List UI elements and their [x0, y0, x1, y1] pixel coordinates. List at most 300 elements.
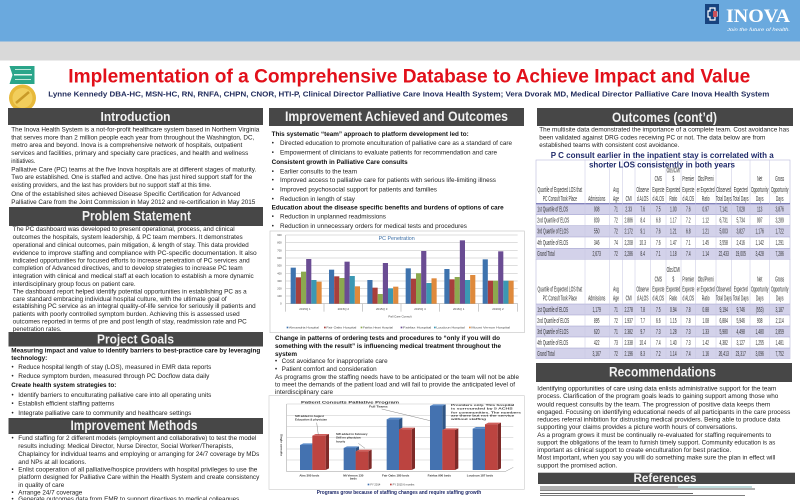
text: problem statement body: evidence to improve staffing and compliance with PC-specific documentation. It also — [13, 251, 257, 257]
text: project goals list: Reduce hospital length of stay (LOS), measured in EMR data reports — [18, 365, 211, 371]
bar chart: PC penetration: 100 — [277, 294, 282, 298]
table column: CMI: 2.278 — [624, 307, 633, 315]
table column: net opportunity days: Net — [757, 276, 763, 284]
group: Loudoun bars — [473, 423, 501, 470]
table column: Obs/Premier expected ratio: er Expected — [697, 187, 715, 195]
table column: CMS expected ALOS: d ALOS — [653, 296, 664, 303]
table column: CMS expected ALOS: 7.4 — [656, 340, 661, 348]
text: recommendations body: process. Clarification of the program goals leads to gaining support among those who — [537, 394, 779, 400]
text: recommendations body: would request consults by the team. The progression of positive data keeps them — [536, 402, 770, 408]
text: problem statement body: interdisciplinary group focus on patient care. — [13, 282, 136, 288]
text: introduction body: initiatives. — [11, 159, 36, 165]
heading: recommendations — [536, 363, 792, 382]
table column: premier expected ALOS — [682, 176, 694, 359]
bar chart: PC penetration: 900 — [277, 233, 282, 237]
group: Mt Vernon bars — [344, 446, 372, 470]
text: introduction body: services and facilities, primary and specialty care practices, and health and wellness — [11, 151, 248, 157]
text: project goals list: technology: — [11, 356, 47, 362]
table column: premier expected ALOS: 7.8 — [686, 318, 691, 326]
panel: improvement achieved and outcomes — [269, 108, 524, 496]
table column: CMI: 2.338 — [624, 340, 633, 348]
table column: net opportunity days: Days — [756, 296, 764, 303]
text: improvement methods list: Chaplaincy for individual teams and employing or arranging for 24/7 coverage by MDs — [18, 452, 259, 458]
icon: gold seal — [9, 84, 36, 112]
table column: admissions: 422 — [594, 340, 600, 348]
group: Fair Oaks bars — [387, 418, 415, 470]
text: introduction body: Palliative Care from the Joint Commission in May 2012 and re-certification in May 2015 — [11, 200, 256, 206]
heading: outcomes continued — [537, 108, 793, 126]
bar chart: patient consults palliative program: beds — [350, 477, 357, 481]
table column: Obs/Premier expected ratio: 1.42 — [702, 340, 709, 348]
heading: references: References — [634, 473, 696, 485]
text: ordering patterns and staffing: Cost avoidance for inappropriate care — [282, 359, 388, 365]
table column: admissions: 895 — [594, 318, 600, 326]
table column: average age: 73 — [614, 340, 618, 348]
table column: observed ALOS: d ALOS — [637, 196, 649, 204]
bar chart: PC penetration: PC Penetration — [379, 236, 415, 242]
text: outcomes list: Consistent growth in Palliative Care consults — [272, 160, 408, 166]
text: outcomes list: Improved psychosocial support for patients and families — [280, 188, 437, 194]
table column: premier expected ALOS: d ALOS — [683, 196, 694, 204]
table column: net opportunity days: 3,428 — [755, 251, 764, 259]
text: outcomes list: • — [272, 214, 274, 220]
group: Fairfax bars — [430, 404, 458, 470]
table column: row labels: PC Consult Took Place — [543, 196, 577, 204]
table column: row labels: 4th Quartile of ELOS — [537, 240, 568, 248]
bar chart: patient consults palliative program: without staffing — [449, 417, 486, 421]
table column: premier expected ALOS: 7.3 — [686, 340, 691, 348]
bar chart: PC penetration: Loudoun Hospital — [436, 326, 465, 330]
table column: Obs/Premier expected ratio: 0.97 — [702, 206, 709, 214]
table column: average age: 72 — [614, 251, 618, 259]
table column: row labels: Grand Total — [537, 251, 555, 259]
text: improvement methods list: Enlist cooperation of all palliative/hospice providers with hospital privileges to use the — [18, 468, 258, 474]
text: ordering patterns and staffing: interdisciplinary care — [275, 390, 334, 396]
table column: row labels: Quartile of Expected LOS that — [538, 187, 582, 195]
text: recommendations body: Identifying opportunities of care using data enlists administrative support for the team — [537, 386, 776, 392]
text: problem statement body: The dashboard report helped identify potential opportunities in establishing PC as a — [13, 290, 247, 296]
bar chart: PC penetration: 800 — [277, 241, 282, 245]
bar chart: patient consults palliative program: Patient Consults Palliative Program — [301, 400, 400, 404]
table column: observed total days: 5,980 — [719, 329, 728, 337]
text: improvement methods list — [12, 436, 259, 500]
bar chart: PC penetration: Mount Vernon Hospital — [471, 326, 510, 330]
table column: admissions: 839 — [594, 217, 600, 225]
table column: premier expected ALOS: 7.4 — [686, 251, 691, 259]
text: outcomes list — [272, 132, 513, 230]
table column: gross opportunity days: Opportunity — [771, 187, 789, 195]
bar chart: PC penetration: 2015Q 2 — [338, 307, 349, 311]
icon: teal certification ribbon — [10, 66, 34, 84]
table column: CMI: CMI — [626, 296, 632, 303]
table column: gross opportunity days: 1,722 — [775, 228, 784, 236]
table column: observed ALOS: 7.8 — [640, 307, 645, 315]
table column: observed ALOS: 8.4 — [640, 217, 645, 225]
table column: observed total days: Total Days — [716, 196, 732, 204]
text: outcomes list: • — [272, 188, 274, 194]
table column: observed total days: 9,194 — [719, 307, 728, 315]
text: ordering patterns and staffing: system — [275, 352, 297, 358]
table column: observed ALOS: Observe — [636, 286, 649, 294]
table column: average age: Age — [613, 296, 619, 303]
bar chart: PC penetration: 2016Q 2 — [492, 307, 504, 311]
text: ordering patterns and staffing — [275, 336, 520, 396]
table column: observed ALOS — [636, 187, 649, 359]
table column: expected total days: 4,498 — [736, 329, 745, 337]
text: outcomes list: Reduction in unnecessary orders for medical tests and procedures — [280, 224, 467, 230]
table column: row labels: 1st Quartile of ELOS — [537, 206, 568, 214]
table column: observed ALOS: 9.7 — [640, 329, 645, 337]
table column: observed ALOS: 8.3 — [640, 351, 645, 359]
table column: Obs/Premier expected ratio: Ratio — [702, 196, 710, 204]
table column: expected total days: Total Days — [733, 196, 749, 204]
table column: row labels: PC Consult Took Place — [543, 296, 577, 303]
table column: Obs/Premier expected ratio: Ratio — [702, 296, 710, 303]
table column: CMI: CMI — [626, 196, 632, 204]
text: problem statement body: operational and clinical outcomes, pain mitigation, & length of stay. This data provided — [13, 243, 249, 249]
table column: observed total days: 6,884 — [719, 318, 728, 326]
table column: expected total days: 19,005 — [736, 251, 746, 259]
table column: observed total days: Total Days — [716, 296, 732, 303]
table column: admissions: 550 — [594, 228, 600, 236]
bar chart: PC penetration: 2015Q 1 — [299, 307, 311, 311]
bar chart: PC penetration: 2016Q 1 — [453, 307, 465, 311]
table column: CMS expected ALOS: Expecte — [652, 187, 664, 195]
bar chart: PC penetration: 700 — [277, 248, 282, 252]
table column: observed total days: 22,433 — [719, 251, 729, 259]
table column: Obs/CMI expected ratio: 1.18 — [670, 251, 677, 259]
bar chart: patient consults palliative program: SW added in August — [295, 414, 324, 418]
table column: Obs/Premier expected ratio: 1.08 — [702, 318, 709, 326]
text: ordering patterns and staffing: to meet the demands of the patient load and will fail to provide the anticipated level of — [275, 382, 515, 388]
table column: Obs/CMI expected ratio: Expected — [666, 286, 680, 294]
text: project goals list: • — [12, 393, 14, 399]
table column: net opportunity days: Opportunity — [751, 187, 769, 195]
table column: Obs/CMI expected ratio: Obs/CMI — [667, 168, 680, 175]
data tables — [536, 160, 790, 359]
table column: expected total days: 5,946 — [736, 318, 745, 326]
table column: admissions: 620 — [594, 329, 600, 337]
table column: observed total days: Observed — [716, 187, 731, 195]
text: problem statement body: patients with poorly controlled symptom burden. Achieving this is assessed used — [13, 312, 240, 318]
text: outcomes list: • — [272, 170, 274, 176]
text: introduction body — [11, 127, 260, 206]
table column: observed ALOS: 10.4 — [639, 340, 646, 348]
table column: premier expected ALOS: 7.8 — [686, 307, 691, 315]
table column: average age: 74 — [614, 240, 618, 248]
table column: gross opportunity days: 3,289 — [775, 217, 784, 225]
table column: observed total days: Observed — [716, 286, 731, 294]
table column: net opportunity days: 908 — [757, 318, 763, 326]
table column: Obs/CMI expected ratio: 1.15 — [670, 318, 677, 326]
text: problem statement body: outcomes the hospitals, system leadership, & PC team members. It demonstrates — [13, 235, 243, 241]
bar chart: PC penetration: 200 — [277, 287, 282, 291]
text: recommendations body: engaged. Focusing on identifying educational needs of all participants in the care process — [537, 410, 790, 416]
table column: net opportunity days: 113 — [757, 206, 762, 214]
text: recommendations body: support the obligations of the team to furnish timely support. Community education is as — [537, 441, 775, 447]
table column: observed total days: 26,413 — [719, 351, 729, 359]
table column: observed ALOS: 7.7 — [640, 318, 645, 326]
table column: Obs/CMI expected ratio: 0.94 — [670, 307, 677, 315]
text: outcomes list: Reduction in length of stay — [280, 197, 355, 203]
bar chart: patient consults palliative program: Fairfax 900 beds — [428, 473, 451, 477]
table column: premier expected ALOS: Premier — [682, 276, 694, 284]
text: recommendations body: reduces referral inhibition for distrusting medical providers. Being able to produce data — [537, 417, 781, 423]
text: improvement methods list: • — [12, 436, 14, 442]
table column: gross opportunity days: 2,859 — [775, 329, 784, 337]
authors: Lynne Kennedy DBA-HC, MSN-HC, RN, RNFA, CHPN, CNOR, HTI-P, Clinical Director Palliative Care Inova Health System; Vera Dvorak MD, Medical Director Palliative Care Inova Health System — [48, 92, 769, 99]
bar chart: patient consults palliative program: are there but not the service — [451, 414, 515, 418]
table column: gross opportunity days: 2,114 — [776, 318, 784, 326]
table column: gross opportunity days: 3,876 — [775, 206, 784, 214]
text: recommendations body: important as clinical support to create enculturation for best practice. — [537, 448, 732, 454]
text: outcomes list: Reduction in unplanned readmissions — [280, 214, 386, 220]
table column: gross opportunity days: 7,752 — [775, 351, 784, 359]
table column: admissions: Admissions — [588, 296, 605, 303]
table column: gross opportunity days: 3,187 — [775, 307, 784, 315]
text: project goals list: Establish efficient staffing patterns — [18, 402, 114, 408]
table column: row labels — [537, 187, 582, 359]
table column: expected total days: 2,416 — [736, 240, 745, 248]
table column: Obs/CMI expected ratio: 1.14 — [670, 351, 677, 359]
table column: average age: 72 — [614, 351, 618, 359]
table: first period — [536, 160, 790, 259]
text: improvement methods list: • — [12, 468, 14, 474]
logo: Inova: Join the future of health. — [726, 27, 790, 32]
text: outcomes list: Empowerment of clinicians to evaluate patients for recommendation and care — [280, 150, 498, 156]
table column: Obs/Premier expected ratio: er Expected — [697, 286, 715, 294]
text: project goals list: • — [12, 411, 14, 417]
text: recommendations body — [536, 386, 790, 470]
table column: expected total days: 23,317 — [736, 351, 746, 359]
bar chart: PC penetration: Fairfax Heart Hospital — [363, 326, 393, 330]
table column: average age: Avg — [613, 187, 619, 195]
table column: Obs/CMI expected ratio: Ratio — [669, 196, 677, 204]
table column: CMS expected ALOS: Expecte — [652, 286, 664, 294]
text: project goals list: Identify barriers to enculturating palliative care into all operating units — [18, 393, 211, 399]
text: project goals list: • — [12, 365, 14, 371]
table column: premier expected ALOS: Premier — [682, 176, 694, 184]
table column: observed total days: 6,731 — [719, 217, 728, 225]
table column: CMS expected ALOS: 7.6 — [656, 228, 661, 236]
table column: net opportunity days: 1,176 — [755, 228, 764, 236]
bar chart: patient consults palliative program: Loudoun 187 beds — [467, 473, 494, 477]
text: introduction body: that serves more than 2 million people each year from throughout the Washington, DC, — [11, 135, 255, 141]
table column: CMS expected ALOS: 7.3 — [656, 329, 661, 337]
table column: CMS expected ALOS: 6.8 — [656, 217, 661, 225]
heading: table title — [551, 151, 774, 170]
text: problem statement body: care standard embracing individual hospital culture, with the ultimate goal of — [13, 297, 227, 303]
table column: Obs/CMI expected ratio: $ — [672, 176, 674, 184]
table column: average age: 71 — [614, 206, 618, 214]
table column: CMI: 2,286 — [624, 251, 633, 259]
table column: gross opportunity days: Gross — [775, 176, 784, 184]
table column: row labels: Quartile of Expected LOS that — [538, 286, 582, 294]
table column: Obs/Premier expected ratio: Obs/Premi — [698, 176, 714, 184]
table column: Obs/Premier expected ratio: 1.45 — [702, 240, 709, 248]
table column: net opportunity days: 3,096 — [755, 351, 764, 359]
text: improvement methods list: and NPs at all locations. — [18, 460, 87, 466]
bar chart: PC penetration: 400 — [277, 271, 282, 275]
text: problem statement body: indicated opportunities for focused efforts to increase penetration of PC services and — [13, 258, 250, 264]
table column: observed ALOS: 7.6 — [640, 206, 645, 214]
bar chart: patient consults palliative program: Fair Oaks 180 beds — [382, 473, 410, 477]
text: outcomes continued body: established teams with consistent cost avoidance. — [539, 143, 680, 149]
table column: average age: 72 — [614, 228, 618, 236]
table column: observed ALOS: d ALOS — [637, 296, 649, 303]
table column: row labels: 2nd Quartile of ELOS — [537, 217, 569, 225]
text: introduction body: existing providers, and the last has providers but no support staff at this time. — [11, 183, 212, 189]
text: project goals list: • — [12, 402, 14, 408]
text: improvement methods list: platform designed for Palliative Care within the Health System and create consistency — [18, 475, 259, 481]
heading: project goals — [8, 332, 263, 346]
text: outcomes list: • — [272, 197, 274, 203]
table column: net opportunity days: (553) — [756, 307, 764, 315]
table column: Obs/CMI expected ratio: $ — [672, 276, 674, 284]
table column: observed ALOS: 10.3 — [639, 240, 646, 248]
bar chart: PC penetration: 500 — [277, 264, 282, 268]
heading: improvement achieved and outcomes: Improvement Achieved and Outcomes — [285, 109, 508, 124]
heading: table title: shorter LOS consistently in both years — [589, 161, 736, 170]
panel: recommendations — [536, 363, 792, 470]
bar chart: PC penetration: 2015Q 3 — [376, 307, 388, 311]
heading: problem statement — [9, 207, 263, 226]
table column: CMI: 2.196 — [624, 351, 633, 359]
table column: Obs/CMI expected ratio: Obs/CMI — [667, 267, 680, 275]
table column: net opportunity days: 1,142 — [755, 240, 764, 248]
text: project goals list: Create health system strategies to: — [11, 383, 116, 389]
table column: admissions: Admissions — [588, 196, 605, 204]
text: outcomes list: • — [272, 224, 274, 230]
table column: average age: 71 — [614, 307, 618, 315]
table column: admissions: 2,673 — [592, 251, 601, 259]
text: problem statement body: The PC dashboard was developed to present operational, process, and clinical — [13, 227, 235, 233]
table column: Obs/Premier expected ratio: 1.21 — [702, 228, 709, 236]
heading: recommendations: Recommendations — [609, 364, 716, 380]
text: introduction body: Palliative Care (PC) teams at the five Inova hospitals are at different stages of maturity. — [11, 168, 257, 174]
text: outcomes list: Improved access to palliative care for patients with serious life-limiting illness — [280, 178, 496, 184]
text: recommendations body: support the promised action. — [537, 464, 618, 470]
table column: average age: Age — [613, 196, 619, 204]
bar chart: patient consults palliative program: Still no physician — [336, 436, 361, 440]
table column: CMS expected ALOS: CMS — [655, 276, 662, 284]
bar chart: PC penetration: 600 — [277, 256, 282, 260]
text: project goals list — [11, 348, 261, 417]
table column: row labels: 3rd Quartile of ELOS — [537, 329, 569, 337]
table column: premier expected ALOS: 7.4 — [686, 351, 691, 359]
table column: Obs/Premier expected ratio: 0.88 — [702, 307, 709, 315]
text: ordering patterns and staffing: As programs grow the staffing needs have to be anticipated or the team will not be able — [275, 375, 520, 381]
text: outcomes list: • — [272, 150, 274, 156]
text: problem statement body: outcomes reported in terms of pre and post length of stay, readmission rate and PC — [13, 320, 247, 326]
text: problem statement body — [13, 227, 257, 333]
text: problem statement body: completion of Advanced directives, and to develop strategies to increase PC team — [13, 266, 243, 272]
text: ordering patterns and staffing: Change in patterns of ordering tests and procedures to “only if you will do — [275, 336, 500, 342]
group: Alex bars — [300, 434, 329, 470]
bar chart: patient consults palliative program: Single consults — [280, 434, 284, 456]
heading: project goals: Project Goals — [97, 332, 174, 346]
logo: Inova — [705, 4, 790, 32]
text: recommendations body: Most important, when you say you will do something make sure the plan in effect will — [537, 456, 775, 462]
bar chart: patient consults palliative program: for communities. The numbers — [451, 410, 522, 414]
text: introduction body: The Inova Health System is a not-for-profit healthcare system based in Northern Virginia — [11, 127, 260, 133]
header band — [0, 0, 800, 60]
text: problem statement body: establishing PC service as an integral quality-of-life service for seriously ill patients and — [13, 304, 256, 310]
text: introduction body: Two are established. One is staffed and active. One has just hired support staff for the — [11, 175, 253, 181]
text: introduction body: One of the established sites achieved Disease Specific Certification for Advanced — [11, 192, 240, 198]
bar chart: patient consults palliative program: Alex 300 beds — [299, 473, 320, 477]
text: outcomes list: Education about the disease specific benefits and burdens of options of care — [272, 206, 504, 212]
table column: admissions: 908 — [594, 206, 600, 214]
bar chart: PC penetration — [270, 231, 524, 333]
text: improvement methods list: Fund staffing for 2 different models (employment and collaborative) to test the model — [18, 436, 256, 442]
text: ordering patterns and staffing: • — [275, 359, 277, 365]
table column: expected total days: Total Days — [733, 296, 749, 303]
table column: net opportunity days: 1,480 — [755, 329, 764, 337]
table column: gross opportunity days: Opportunity — [771, 286, 789, 294]
bar chart: patient consults palliative program: Mt Vernon 130 — [343, 473, 364, 477]
text: project goals list: Integrate palliative care to community and healthcare settings — [18, 411, 191, 417]
table column: expected total days: Expected — [734, 187, 748, 195]
heading: table title: P C consult earlier in the inpatient stay is correlated with a — [551, 151, 774, 160]
table column: gross opportunity days: 7,286 — [775, 251, 784, 259]
table column: expected total days: 5,734 — [736, 217, 745, 225]
table column: Obs/Premier expected ratio: 1.14 — [702, 251, 709, 259]
text: introduction body: metro area and beyond. Inova is a comprehensive network of hospitals, outpatient — [11, 143, 243, 149]
bar chart: PC penetration: Alexandria Hospital — [289, 326, 319, 330]
table column: Obs/Premier expected ratio: 1.33 — [702, 329, 709, 337]
bar chart: patient consults palliative program: is surrounded by 5 ACHS — [451, 407, 513, 411]
table column: Obs/CMI expected ratio: 1.17 — [670, 217, 677, 225]
bar chart: patient consults palliative program: SW added in February — [336, 432, 368, 436]
table column: expected total days: 3,827 — [736, 228, 745, 236]
heading: outcomes continued: Outcomes (cont’d) — [612, 109, 717, 125]
table column: CMS expected ALOS: CMS — [655, 176, 662, 184]
table column: CMI: 2.172 — [624, 228, 633, 236]
text: outcomes list: • — [272, 141, 274, 147]
table column: expected total days: 7,028 — [736, 206, 745, 214]
text: outcomes list: This systematic “team” approach to platform development led to: — [272, 132, 469, 138]
table column: average age: 71 — [614, 329, 618, 337]
table column: Obs/CMI expected ratio: Expected — [666, 187, 680, 195]
text: improvement methods list: • — [12, 490, 14, 496]
table column: admissions: 346 — [594, 240, 600, 248]
table column: CMS expected ALOS: 6.6 — [656, 318, 661, 326]
table column: premier expected ALOS: 6.8 — [686, 228, 691, 236]
bar chart: patient consults palliative program: Providers only. This hospital — [451, 403, 515, 407]
bar chart: patient consults palliative program — [269, 396, 524, 489]
text: ordering patterns and staffing: something with the result” is influencing medical treatment throughout the — [275, 344, 502, 350]
panel: references — [538, 473, 795, 495]
table column: admissions — [588, 196, 605, 359]
table column: CMS expected ALOS: 7.5 — [656, 206, 661, 214]
table column: net opportunity days: Net — [757, 176, 763, 184]
text: recommendations body: supporting your claims provides a picture worth hours of conversations. — [537, 425, 738, 431]
table column: expected total days: 3,127 — [736, 340, 745, 348]
text: improvement methods list: results including: Medical Director, Nurse Director, Social Worker/Therapists, — [18, 444, 234, 450]
table column: average age: 72 — [614, 318, 618, 326]
bar chart: patient consults palliative program: Education & physician — [295, 418, 327, 422]
heading: improvement methods — [8, 418, 263, 434]
table: second period — [536, 259, 790, 359]
table column: Obs/CMI expected ratio: 1.00 — [670, 206, 677, 214]
text: recommendations body: As a program grows it must be continually re-evaluated for staffing requirements to — [537, 433, 772, 439]
table column: observed total days: 3,558 — [719, 240, 728, 248]
bar chart: PC penetration: 0 — [280, 302, 282, 306]
table column: average age: 72 — [614, 217, 618, 225]
table column: Obs/CMI expected ratio: 1.47 — [670, 240, 677, 248]
bar chart: PC penetration: 2015Q 4 — [414, 307, 426, 311]
